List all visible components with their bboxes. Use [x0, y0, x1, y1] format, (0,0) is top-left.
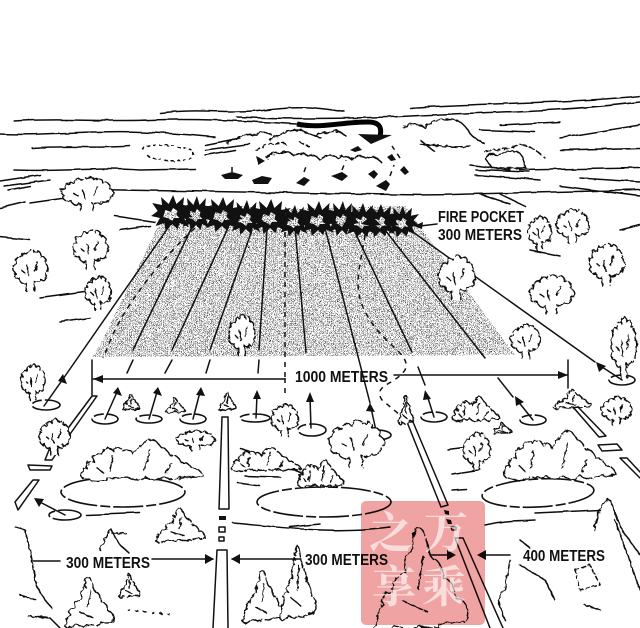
fire pocket bursts — [151, 195, 419, 238]
stippled kill zone — [92, 206, 515, 357]
dimension: 1000 meters — [92, 360, 568, 395]
watermark characters: 享 — [372, 551, 416, 615]
enemy tanks — [221, 146, 409, 191]
label: fire pocket: FIRE POCKET — [438, 209, 524, 226]
dimension: 1000 meters: 1000 METERS — [295, 369, 388, 386]
label: fire pocket — [414, 209, 524, 244]
dimension: left 300 meters: 300 METERS — [66, 555, 150, 572]
watermark characters — [369, 497, 468, 615]
dashed routes — [103, 228, 406, 415]
dimension: left 300 meters — [33, 554, 214, 572]
watermark characters: 乘 — [422, 551, 466, 615]
large ponds — [61, 476, 595, 517]
watermark stamp — [361, 501, 485, 625]
dimension: 400 meters: 400 METERS — [523, 548, 605, 565]
dimension: middle 300 meters: 300 METERS — [305, 552, 388, 569]
trees — [13, 177, 640, 628]
arrow: enemy advance — [297, 122, 392, 144]
label: fire pocket: 300 METERS — [438, 227, 522, 244]
distant tree line — [142, 119, 545, 168]
dimension: middle 300 meters — [231, 550, 456, 569]
lines of fire — [63, 225, 595, 403]
roads — [15, 396, 640, 628]
dimension: 400 meters — [477, 548, 605, 565]
foxholes and firing arrows — [32, 362, 635, 520]
watermark characters: 万 — [424, 497, 468, 561]
watermark characters: 之 — [369, 497, 413, 561]
distant terrain lines — [0, 96, 640, 530]
